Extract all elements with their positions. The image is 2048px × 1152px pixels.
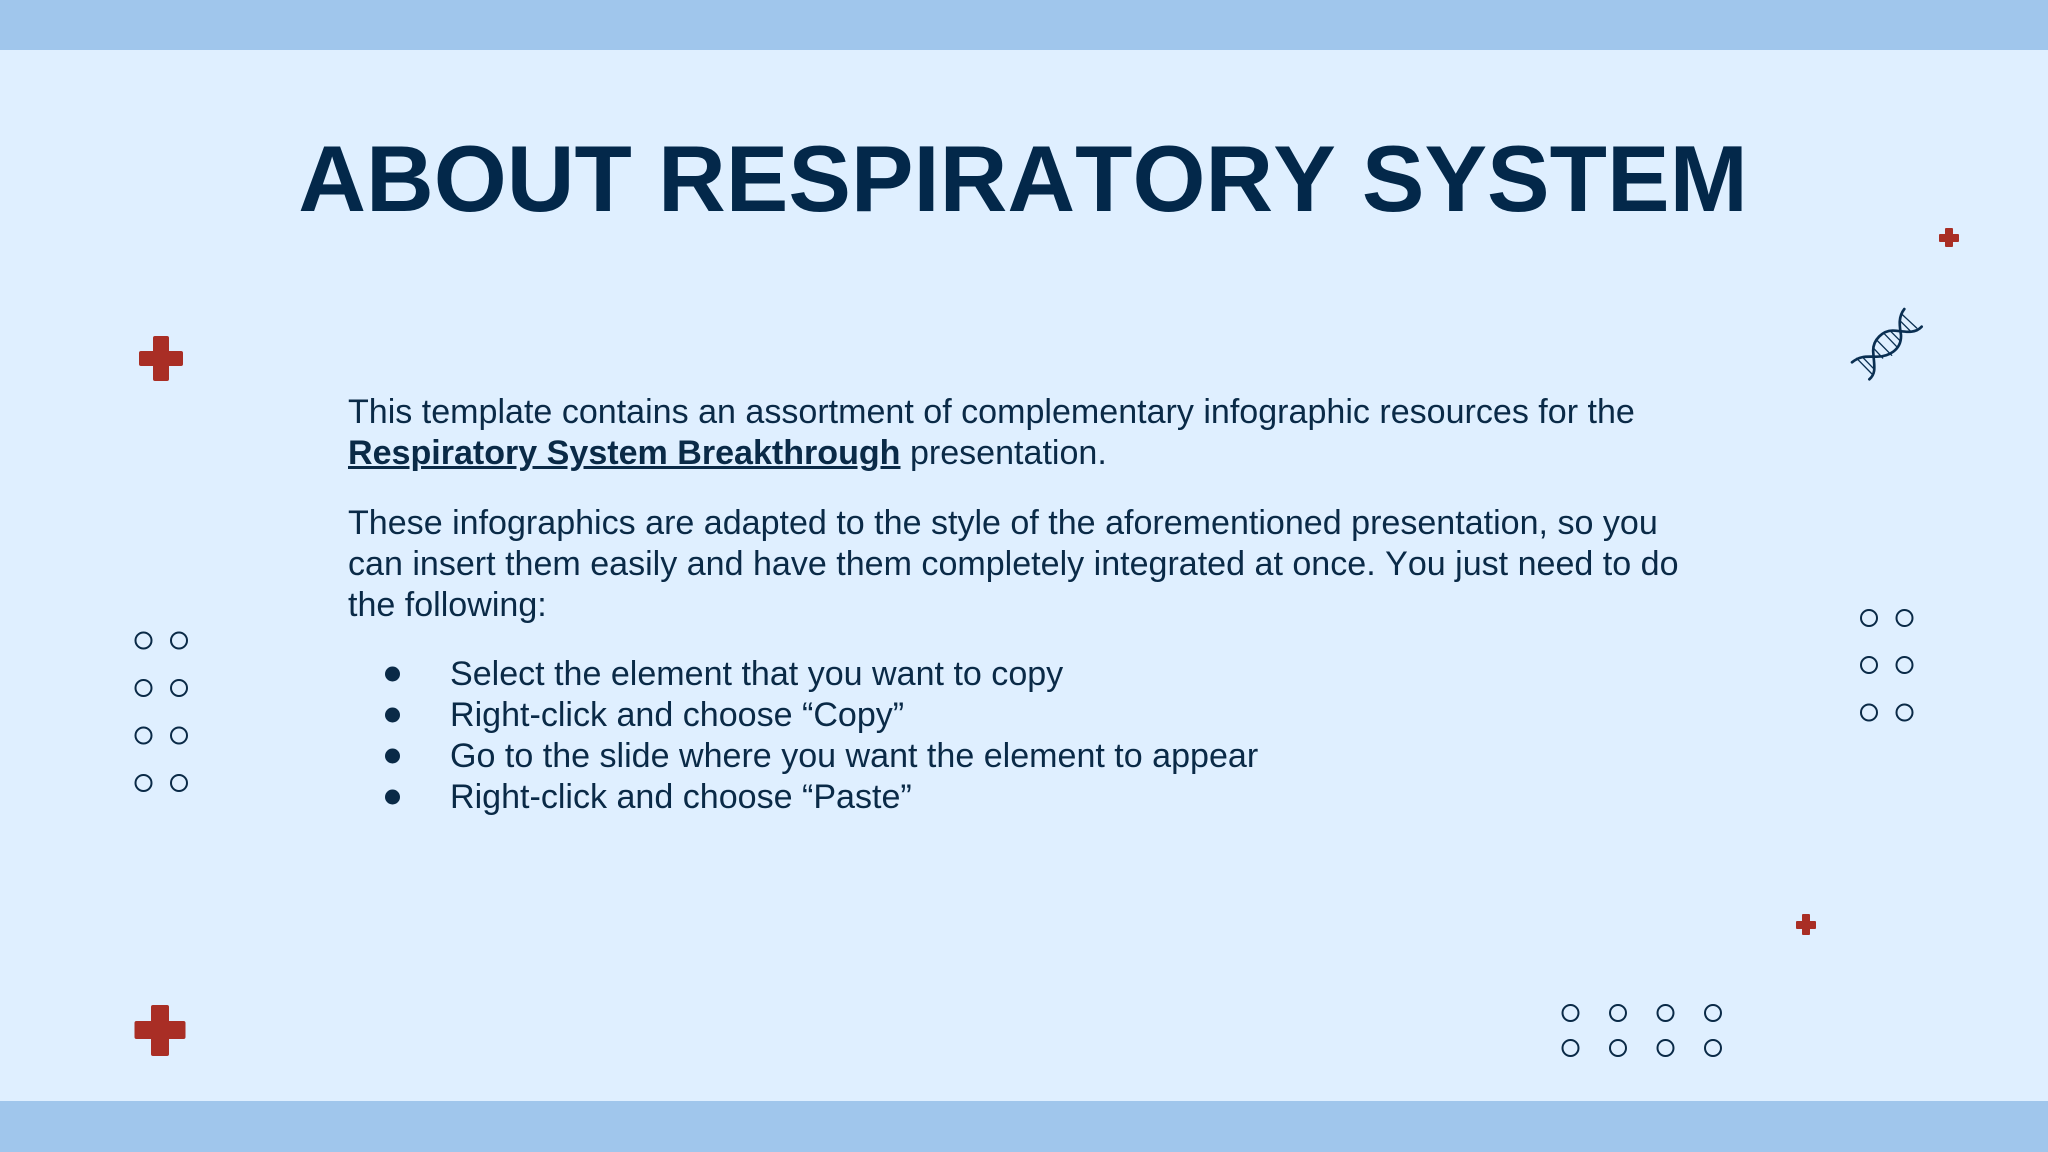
bullet 2: Right-click and choose “Copy” <box>450 696 904 734</box>
paragraph: instructions: the following: <box>348 586 547 624</box>
bottom band <box>0 1101 2048 1152</box>
bullet 1: Select the element that you want to copy <box>450 655 1063 693</box>
paragraph: intro: This template contains an assortment of complementary infographic resources for the <box>348 393 1635 431</box>
top band <box>0 0 2048 50</box>
bullet markers <box>385 666 400 804</box>
icon: DNA helix <box>1850 308 1924 381</box>
bullet 4: Right-click and choose “Paste” <box>450 778 912 816</box>
paragraph: intro <box>348 393 1635 472</box>
paragraph: intro: Respiratory System Breakthrough presentation. <box>348 434 1107 472</box>
paragraph: instructions: can insert them easily and have them completely integrated at once. You just need to do <box>348 545 1679 583</box>
paragraph: instructions: These infographics are adapted to the style of the aforementioned presentation, so you <box>348 504 1658 542</box>
paragraph: instructions <box>348 504 1679 624</box>
text block: body copy <box>348 393 1679 816</box>
title: ABOUT RESPIRATORY SYSTEM <box>298 126 1748 231</box>
bullet 3: Go to the slide where you want the element to appear <box>450 737 1258 775</box>
bullet list: steps <box>385 655 1258 816</box>
